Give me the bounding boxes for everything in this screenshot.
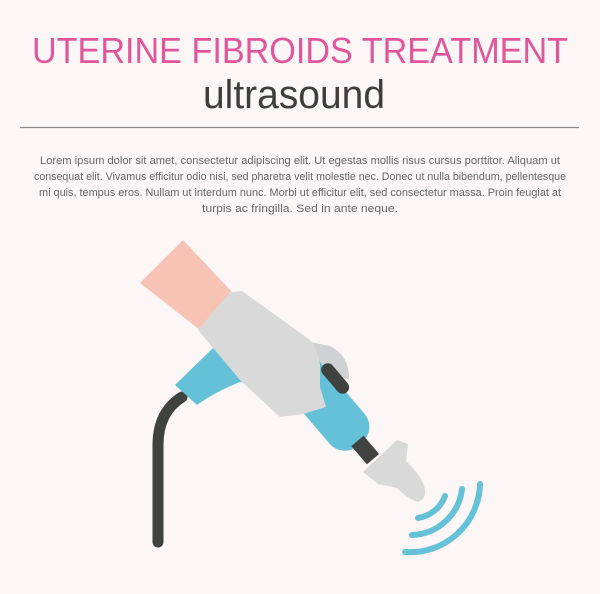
paragraph: Lorem ipsum dolor sit amet, consectetur adipiscing elit. Ut egestas mollis risus cursus porttitor. Aliquam ut	[40, 155, 560, 167]
paragraph: turpis ac fringilla. Sed in ante neque.	[202, 203, 398, 215]
glove thumb back	[300, 340, 349, 380]
cable	[158, 397, 182, 542]
subtitle: ultrasound	[203, 73, 385, 117]
probe handle arc	[175, 340, 255, 405]
illustration: ultrasound probe in hand	[140, 240, 480, 552]
title: UTERINE FIBROIDS TREATMENT	[32, 30, 568, 71]
skin arm	[140, 240, 232, 330]
probe body and neck (rotated frame)	[260, 332, 391, 474]
paragraph	[34, 155, 566, 215]
dark band	[319, 361, 352, 396]
paragraph: consequat elit. Vivamus efficitur odio nisi, sed pharetra velit molestie nec. Donec ut nulla bibendum, pellentesque	[34, 171, 566, 183]
tip	[363, 440, 425, 502]
ultrasound waves	[405, 484, 480, 552]
paragraph: mi quis, tempus eros. Nullam ut interdum nunc. Morbi ut efficitur elit, sed consectetur massa. Proin feugiat at	[39, 187, 561, 199]
glove	[198, 291, 326, 417]
